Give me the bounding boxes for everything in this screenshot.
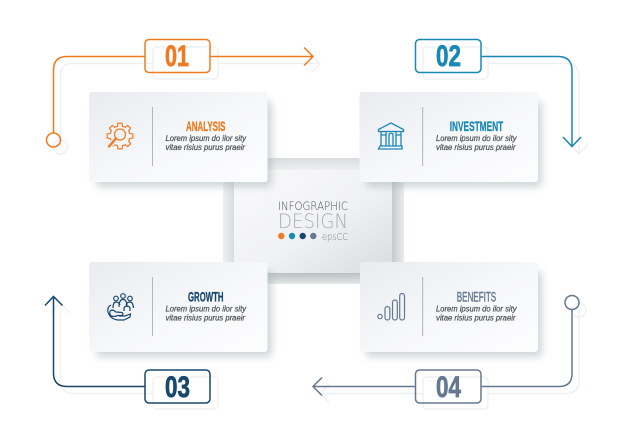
panel: analysis card — [89, 92, 272, 187]
step 01 arrow and number: 01 — [165, 40, 189, 73]
decorative ghost lines — [51, 47, 588, 409]
body text: benefits — [436, 304, 517, 322]
body text: analysis — [166, 134, 247, 152]
icon: people in hand — [108, 294, 134, 320]
body text: analysis: vitae risius purus praeir — [166, 143, 245, 152]
step 01 arrow and number — [46, 40, 313, 147]
panel: benefits card — [360, 262, 542, 357]
body text: investment: Lorem ipsum do ilor sity — [436, 134, 517, 143]
heading: growth: GROWTH — [188, 290, 224, 304]
heading: benefits: BENEFITS — [457, 290, 496, 304]
heading: investment: INVESTMENT — [450, 119, 504, 134]
body text: benefits: vitae risius purus praeir — [436, 314, 516, 322]
icon: gear with magnifier — [107, 123, 133, 149]
color dots — [278, 233, 316, 239]
panel: growth card — [89, 262, 272, 357]
center title — [278, 199, 348, 243]
center title: epsCC — [322, 232, 348, 243]
step 04 arrow and number — [313, 296, 579, 404]
heading: analysis: ANALYSIS — [186, 119, 226, 134]
step 02 arrow and number: 02 — [436, 40, 461, 73]
body text: growth: vitae risius purus praeir — [166, 314, 245, 322]
body text: investment: vitae risius purus praeir — [436, 143, 516, 152]
body text: analysis: Lorem ipsum do ilor sity — [166, 134, 247, 143]
step 02 arrow and number — [416, 40, 581, 146]
body text: growth: Lorem ipsum do ilor sity — [166, 304, 247, 314]
panel: center square — [223, 158, 404, 284]
step 03 arrow and number — [45, 296, 210, 404]
body text: growth — [166, 304, 247, 322]
center title: INFOGRAPHIC — [278, 199, 348, 213]
icon: signal bars — [378, 294, 404, 320]
panel: investment card — [360, 92, 542, 187]
body text: benefits: Lorem ipsum do ilor sity — [436, 304, 517, 314]
step 03 arrow and number: 03 — [165, 371, 190, 404]
step 04 arrow and number: 04 — [436, 371, 461, 404]
icon: bank building — [378, 123, 404, 149]
center title: DESIGN — [278, 210, 348, 233]
body text: investment — [436, 134, 517, 152]
